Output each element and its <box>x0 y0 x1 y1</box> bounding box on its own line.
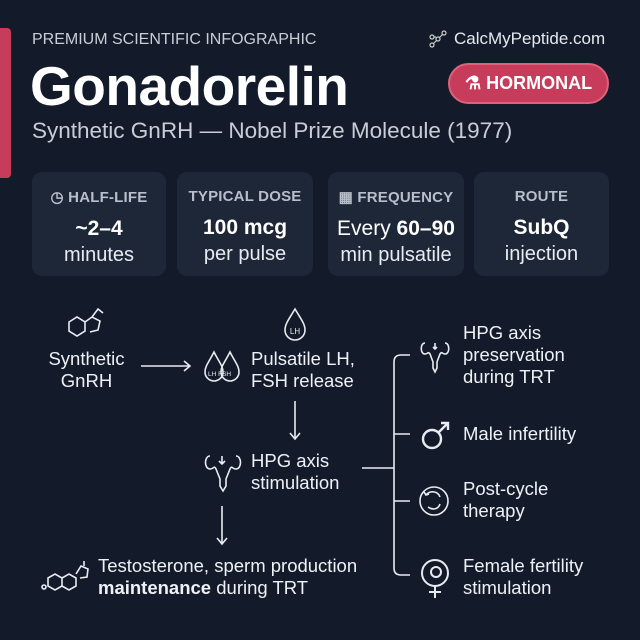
text: HPG preservation: during TRT <box>463 366 555 387</box>
icon: LH FSH drops <box>205 352 239 381</box>
text: female fertility <box>463 555 584 598</box>
text: HPG stimulation <box>251 450 339 493</box>
card: half-life: ~2–4 <box>75 217 123 240</box>
card: route <box>474 172 609 276</box>
card: dose: 100 mcg <box>203 216 287 239</box>
connector + bracket <box>362 355 410 575</box>
text: HPG stimulation: stimulation <box>251 472 339 493</box>
accent bar <box>0 28 11 178</box>
text: pulsatile: FSH release <box>251 370 354 391</box>
card: frequency: min pulsatile <box>340 244 452 266</box>
card: route: ROUTE <box>515 188 568 205</box>
icon: LH drop: LH <box>290 327 300 336</box>
icon: kidneys <box>206 456 240 491</box>
text: testosterone: Testosterone, sperm production <box>98 555 357 576</box>
text: synthetic GnRH: Synthetic <box>48 348 125 369</box>
icon: female <box>422 560 448 598</box>
icon: steroid <box>42 561 88 590</box>
card: dose: TYPICAL DOSE <box>188 188 301 205</box>
text: HPG preservation: preservation <box>463 344 565 365</box>
card: half-life <box>32 172 166 276</box>
card: dose: per pulse <box>204 243 286 265</box>
badge: ⚗ HORMONAL <box>465 73 592 93</box>
text: synthetic GnRH: GnRH <box>61 370 112 391</box>
card: route: SubQ <box>514 216 570 239</box>
text: synthetic GnRH <box>48 348 125 391</box>
icon: male <box>423 423 448 448</box>
title: Gonadorelin <box>30 55 348 117</box>
text: testosterone <box>98 555 357 598</box>
text: pulsatile <box>251 348 355 391</box>
text: post-cycle: therapy <box>463 500 525 521</box>
icon: LH FSH drops: LH FSH <box>208 371 231 378</box>
text: pulsatile: Pulsatile LH, <box>251 348 355 369</box>
brand: CalcMyPeptide.com <box>454 29 605 48</box>
text: HPG preservation <box>463 322 565 387</box>
text: post-cycle: Post-cycle <box>463 478 548 499</box>
icon: kidneys small <box>421 343 449 372</box>
text: HPG preservation: HPG axis <box>463 322 541 343</box>
text: female fertility: Female fertility <box>463 555 583 576</box>
icon: post-cycle <box>420 487 448 515</box>
card: frequency: ▦ FREQUENCY <box>339 189 453 206</box>
icon: LH drop <box>285 309 305 340</box>
arrow right <box>141 361 190 371</box>
card: half-life: minutes <box>64 244 134 266</box>
card: dose <box>177 172 313 276</box>
text: post-cycle <box>463 478 548 521</box>
card: frequency: Every 60–90 <box>337 217 455 240</box>
text: HPG stimulation: HPG axis <box>251 450 329 471</box>
icon: molecule <box>69 309 103 336</box>
card: half-life: ◷ HALF-LIFE <box>51 189 147 206</box>
card: route: injection <box>505 243 578 265</box>
text: female fertility: stimulation <box>463 577 551 598</box>
text: testosterone: maintenance during TRT <box>98 577 308 598</box>
text: male infertility: Male infertility <box>463 423 576 444</box>
badge <box>448 63 609 104</box>
arrow down 1 <box>290 401 300 439</box>
arrow down 2 <box>217 506 227 544</box>
subtitle: Synthetic GnRH — Nobel Prize Molecule (1977) <box>32 118 512 143</box>
card: frequency <box>328 172 464 276</box>
eyebrow: PREMIUM SCIENTIFIC INFOGRAPHIC <box>32 31 316 48</box>
